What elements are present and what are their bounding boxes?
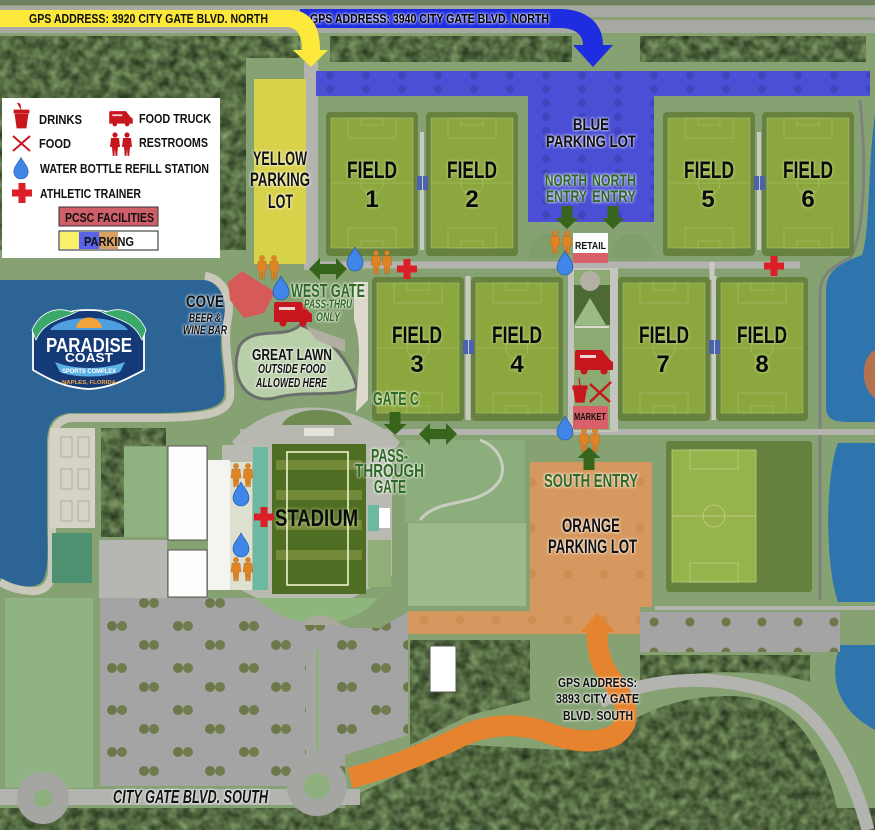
yellow route arrow: GPS ADDRESS: 3920 CITY GATE BLVD. NORTH <box>29 11 268 26</box>
yellow parking lot <box>254 79 306 264</box>
yellow lot label: YELLOW <box>253 149 307 170</box>
icon: market food <box>590 382 611 402</box>
stadium annex and athletic buildings <box>99 446 252 598</box>
athletic trainer label: ATHLETIC TRAINER <box>40 186 141 201</box>
field labels: 2 <box>465 186 479 213</box>
large soccer field <box>666 441 812 592</box>
blue route arrow <box>300 9 613 67</box>
blue route arrow: GPS ADDRESS: 3940 CITY GATE BLVD. NORTH <box>310 11 549 26</box>
field 8 <box>716 277 808 421</box>
cove label: COVE <box>186 292 224 311</box>
market building: MARKET <box>574 411 606 423</box>
field labels: FIELD <box>347 157 397 184</box>
food truck label: FOOD TRUCK <box>139 111 211 126</box>
south entry label: SOUTH ENTRY <box>544 471 638 491</box>
orange lot label: PARKING LOT <box>548 537 637 558</box>
south gps label: 3893 CITY GATE <box>556 691 639 706</box>
great lawn label: ALLOWED HERE <box>255 375 327 390</box>
icon: drinks <box>14 103 29 128</box>
great lawn <box>236 325 357 399</box>
blue lot label: BLUE <box>573 115 609 134</box>
icon: food truck <box>109 111 133 126</box>
icons: water drops <box>233 247 573 557</box>
field labels: FIELD <box>639 322 689 349</box>
field labels: FIELD <box>737 322 787 349</box>
blue lot label <box>546 115 636 151</box>
orange lot label: ORANGE <box>562 516 620 537</box>
yellow lot label: LOT <box>268 192 293 213</box>
field 2 <box>426 112 518 256</box>
field labels: FIELD <box>447 157 497 184</box>
field 7 <box>618 277 710 421</box>
athletic lawn <box>124 447 166 537</box>
field labels: 6 <box>801 186 815 213</box>
pass-through gate label <box>355 446 424 497</box>
north entry labels: NORTH <box>545 171 587 190</box>
orange parking lot <box>408 462 652 634</box>
south gps label: BLVD. SOUTH <box>563 708 633 723</box>
field labels: 5 <box>701 186 715 213</box>
traffic circles <box>17 650 347 824</box>
pass-through gate label: THROUGH <box>355 461 424 481</box>
entry plaza <box>232 408 400 448</box>
icons: food trucks <box>274 302 613 375</box>
field 4 <box>471 277 563 421</box>
west lake <box>0 280 225 586</box>
field labels: FIELD <box>392 322 442 349</box>
north entry labels <box>545 171 636 206</box>
east lakes <box>820 100 875 730</box>
north entry labels: NORTH <box>592 171 636 190</box>
parking key: PARKING <box>84 234 134 249</box>
parking surface center <box>296 606 408 786</box>
retail building <box>573 233 608 263</box>
icon: food <box>13 136 30 151</box>
great lawn label: OUTSIDE FOOD <box>258 361 326 376</box>
pass-through gate label: PASS- <box>371 446 408 466</box>
south gps label: GPS ADDRESS: <box>558 675 637 690</box>
parking surface west <box>100 598 296 786</box>
stadium <box>222 444 392 625</box>
legend panel <box>2 98 220 258</box>
icon: athletic trainer cross <box>12 183 32 203</box>
stadium label: STADIUM <box>275 505 358 532</box>
logo: paradise coast sports complex: NAPLES, FLORIDA <box>62 380 116 386</box>
lake shore paths <box>0 276 230 591</box>
field labels: FIELD <box>492 322 542 349</box>
north plaza gardens <box>528 233 654 258</box>
field labels: 8 <box>755 351 769 378</box>
practice field <box>52 533 92 583</box>
orange route arrow <box>350 613 626 778</box>
yellow lot label <box>250 149 310 213</box>
water refill label: WATER BOTTLE REFILL STATION <box>40 161 209 176</box>
great lawn label: GREAT LAWN <box>252 347 332 364</box>
yellow route arrow <box>0 10 328 67</box>
market building <box>573 406 608 429</box>
field labels <box>347 157 833 378</box>
blue lot label: PARKING LOT <box>546 132 636 151</box>
field 1 <box>326 112 418 256</box>
icon: water drop <box>14 157 28 179</box>
central lawns <box>405 440 526 606</box>
icons: athletic trainer crosses <box>254 256 784 527</box>
west gate label: PASS-THRU <box>304 297 352 311</box>
food label: FOOD <box>39 136 71 151</box>
icon: market drink <box>573 378 587 402</box>
pass-through landscape strip <box>354 282 368 412</box>
north entry labels: ENTRY <box>592 187 636 206</box>
retail building: RETAIL <box>575 240 606 252</box>
south gps label <box>556 675 639 723</box>
central promenade <box>568 268 618 432</box>
restrooms label: RESTROOMS <box>139 135 208 150</box>
cove building <box>228 271 275 318</box>
drinks label: DRINKS <box>39 112 82 127</box>
cove label <box>183 292 227 337</box>
north entry labels: ENTRY <box>546 187 587 206</box>
pcsc facilities key: PCSC FACILITIES <box>65 210 154 225</box>
orange lot label <box>548 516 637 558</box>
blue parking lot <box>316 71 870 222</box>
south lawn west <box>5 598 93 788</box>
logo: paradise coast sports complex: COAST <box>65 350 113 365</box>
field 3 <box>372 277 464 421</box>
west gate label: WEST GATE <box>291 281 365 301</box>
icon: restrooms <box>110 132 132 156</box>
parking key <box>59 231 158 250</box>
field 5 <box>663 112 755 256</box>
logo: paradise coast sports complex: SPORTS COMPLEX <box>62 368 117 375</box>
west gate label: ONLY <box>316 310 341 324</box>
cove label: WINE BAR <box>183 323 227 337</box>
great lawn label <box>252 347 332 390</box>
field labels: 4 <box>510 351 524 378</box>
north road <box>0 0 875 33</box>
field labels: FIELD <box>783 157 833 184</box>
yellow lot label: PARKING <box>250 170 310 191</box>
logo: paradise coast sports complex: PARADISE <box>46 335 132 357</box>
west gate pavilion <box>306 326 345 352</box>
pass-through gate label: GATE <box>374 477 406 497</box>
field labels: 7 <box>656 351 670 378</box>
parking surface south east <box>640 612 840 652</box>
forest: southern woods <box>0 640 875 830</box>
field dividers and benches <box>417 132 765 410</box>
logo: paradise coast sports complex <box>32 310 146 389</box>
pcsc facilities key <box>59 207 158 226</box>
city gate blvd south label: CITY GATE BLVD. SOUTH <box>113 787 269 807</box>
field 6 <box>762 112 854 256</box>
tennis courts <box>50 428 95 528</box>
building: south storage <box>430 646 456 692</box>
cove label: BEER & <box>189 311 221 325</box>
arrows: gates <box>309 206 624 470</box>
forest: north-west woods <box>0 36 866 250</box>
field labels: FIELD <box>684 157 734 184</box>
icons: restrooms <box>231 230 600 581</box>
west gate label <box>291 281 365 324</box>
field labels: 1 <box>365 186 379 213</box>
gate c label: GATE C <box>373 389 419 409</box>
field labels: 3 <box>410 351 424 378</box>
forest: stadium west strip <box>101 428 166 537</box>
